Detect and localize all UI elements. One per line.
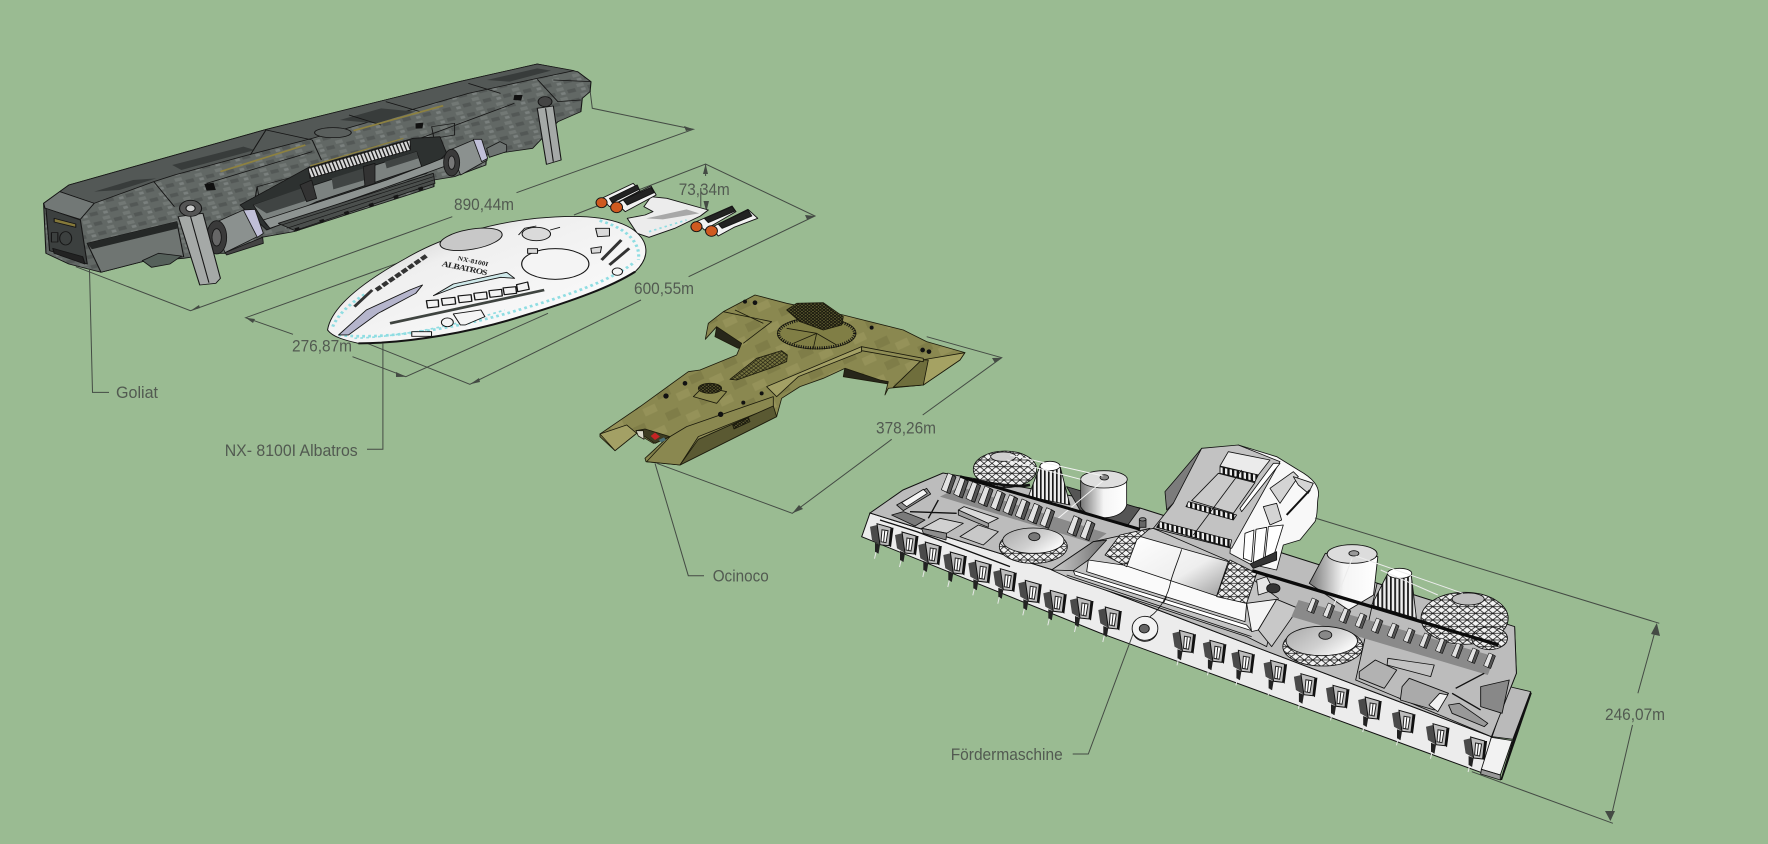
Ocinoco front bay (636, 429, 670, 443)
cone right (1372, 568, 1416, 618)
label: 246,07m: 246,07m (1605, 706, 1665, 724)
Ocinoco dome (787, 303, 843, 330)
Albatros lower hatch (412, 268, 623, 336)
Ocinoco spine hatch (730, 351, 787, 380)
dimension: Ocinoco 378,26m (657, 337, 1002, 513)
Goliat lower hull (87, 222, 184, 272)
label: 276,87m: 276,87m (292, 338, 352, 356)
rear pipe joint (1257, 577, 1280, 595)
Goliat rear shoulder seams (537, 79, 591, 102)
back rail right (1252, 571, 1499, 645)
command top panel (1220, 452, 1270, 475)
Goliat keel rail (278, 173, 435, 231)
label: 890,44m: 890,44m (454, 196, 514, 214)
Goliat hull dark stripe (87, 222, 178, 249)
back rail left (960, 477, 1140, 529)
Albatros neck cyan marks (649, 220, 687, 232)
deck machinery right (1359, 658, 1509, 727)
central plinth and barrel (1052, 445, 1319, 647)
Albatros nacelles upper pair (596, 183, 656, 213)
command flank panels (1263, 472, 1313, 525)
Ocinoco front fork left (600, 425, 637, 451)
dimension lines: Albatros 600,55m, 276,87m and 73,34m (246, 164, 815, 384)
machine main deck (870, 473, 1516, 737)
Goliat side seam lines (154, 103, 514, 207)
Ocinoco hull spine (647, 397, 773, 465)
plinth lower bands (1067, 571, 1252, 637)
Albatros forward deck lines (354, 240, 629, 307)
command mid grill (1186, 502, 1237, 520)
plinth left wedge (1052, 540, 1107, 571)
barrel lattice right (1217, 560, 1257, 603)
end block base (1481, 769, 1500, 780)
Goliat forward engine (444, 139, 488, 176)
cable lines (880, 500, 1010, 567)
end block top (1492, 687, 1531, 739)
barrel lattice left (1105, 528, 1150, 567)
command lower grill (1157, 522, 1232, 547)
Ocinoco side vent (733, 417, 750, 429)
Goliat drum dark sections (253, 152, 418, 213)
raised hatch one (922, 518, 963, 540)
Goliat side window frame (257, 123, 455, 200)
Albatros hull name: NX-8100I (457, 255, 489, 268)
plinth white step (1087, 560, 1247, 622)
Goliat front face (46, 208, 87, 264)
ship: NX-8100I Albatros (328, 183, 758, 343)
Goliat machinery dark bay (240, 137, 447, 230)
Albatros hull rail (390, 290, 544, 323)
Goliat front details (51, 218, 85, 264)
louvre vents (1243, 525, 1283, 568)
lattice dome right (1421, 592, 1508, 650)
command block right flank (1230, 445, 1319, 570)
Goliat comb grating (308, 140, 411, 178)
Ocinoco leading edge (767, 347, 862, 397)
leader: Goliat (90, 270, 109, 392)
end block dark side (1500, 692, 1532, 780)
command mid panel (1192, 473, 1255, 513)
dark vent tray (892, 512, 925, 526)
Goliat roof (60, 64, 574, 203)
Albatros ventral strip (339, 285, 422, 335)
Albatros bridge dome (519, 226, 560, 241)
Goliat front chamfer (44, 192, 94, 219)
right half details (1132, 545, 1516, 737)
label: NX- 8100I Albatros: NX- 8100I Albatros (225, 442, 358, 460)
leader: Albatros (367, 343, 383, 449)
leader: Fördermaschine (1073, 633, 1133, 754)
label: Fördermaschine: Fördermaschine (951, 746, 1063, 764)
Goliat gold stripes (220, 106, 443, 172)
ship: Fördermaschine (862, 445, 1532, 780)
dimension: Fördermaschine 246,07m (1315, 518, 1660, 823)
end block lower (1481, 737, 1512, 775)
Albatros hull name: ALBATROS (441, 259, 489, 277)
Goliat drum joints (300, 163, 375, 202)
flat dome left (999, 528, 1067, 563)
Ocinoco hull dots (663, 300, 931, 417)
command seam (1193, 470, 1242, 535)
Albatros neck shading (646, 209, 699, 219)
pipes right (1331, 556, 1463, 613)
central barrel (1127, 535, 1228, 596)
cylinder left (1081, 471, 1127, 518)
label: 600,55m: 600,55m (634, 280, 694, 298)
lattice dome left (973, 451, 1037, 488)
Goliat hatches (204, 95, 523, 191)
Goliat landing struts (178, 97, 561, 285)
Ocinoco hull (600, 295, 965, 465)
Ocinoco ring platform (777, 318, 856, 349)
Albatros lower rim (358, 272, 635, 343)
cone left (1028, 461, 1070, 505)
Goliat lower pod (142, 253, 181, 267)
Ocinoco wing ridge (893, 360, 928, 387)
Goliat right landing strut (537, 97, 561, 164)
plinth right wedge (1247, 599, 1277, 632)
Albatros top hatch (438, 224, 504, 255)
stacked vent box (897, 488, 931, 511)
side port disc right half (1132, 616, 1158, 640)
Ocinoco side panel (680, 406, 777, 465)
deck machinery at left end (880, 488, 1010, 567)
raised hatch two (958, 507, 998, 527)
command deck (1153, 445, 1280, 548)
label: 378,26m: 378,26m (876, 419, 936, 437)
Goliat underside machinery (207, 137, 507, 255)
Ocinoco wing undersides (715, 327, 890, 384)
Albatros hull cyan markings (333, 221, 639, 338)
label: Ocinoco: Ocinoco (713, 568, 769, 586)
machine end block (1481, 687, 1532, 780)
machine side modules (870, 524, 1487, 772)
Goliat main drum (253, 152, 422, 225)
ship: Goliat (44, 64, 591, 285)
fins left (941, 473, 1095, 541)
Ocinoco turret (693, 383, 727, 403)
pipes left (1007, 455, 1103, 533)
Albatros upper panel (434, 272, 515, 296)
machine side wall (862, 513, 1491, 773)
Goliat body (44, 64, 591, 272)
small stack (1139, 518, 1146, 527)
Albatros engineering neck (627, 197, 708, 237)
Goliat roof dark plates (94, 68, 551, 192)
Ocinoco rear ridge (862, 347, 923, 362)
Albatros small hatches (528, 228, 609, 253)
label: 73,34m: 73,34m (679, 181, 730, 199)
Goliat rail lines (282, 177, 434, 228)
Goliat left landing strut (178, 200, 220, 285)
Albatros window squares (426, 282, 529, 308)
dimension: Goliat length 890,44m (76, 90, 693, 311)
Goliat long barrel (263, 157, 448, 228)
Ocinoco port wing frame (723, 310, 772, 343)
plinth base (1052, 528, 1278, 647)
Goliat roof seams (250, 83, 501, 155)
barrel seam (1150, 549, 1182, 617)
cylinder right (1309, 545, 1378, 610)
Albatros nacelles lower pair (691, 206, 758, 236)
ship: Ocinoco (600, 295, 965, 465)
fin shadow band right (1291, 600, 1495, 675)
Goliat gold comb stripe (310, 138, 403, 166)
Goliat rail studs (295, 184, 435, 230)
Goliat rear engine (207, 209, 263, 255)
fins right (1307, 598, 1495, 668)
Goliat aft barrel (487, 142, 507, 157)
side port disc (1132, 617, 1158, 641)
command right trim (1240, 463, 1280, 512)
deck plate right (1356, 583, 1516, 737)
left half details (940, 451, 1158, 641)
label: Goliat: Goliat (116, 384, 158, 402)
Albatros saucer (328, 216, 646, 343)
Goliat hull silhouette (44, 64, 591, 272)
command top grill (1220, 467, 1258, 482)
command left flank (1165, 448, 1220, 510)
Ocinoco starboard wing tip (893, 353, 965, 387)
dark deck plate behind cylinder (1067, 487, 1140, 527)
raised hatch three (960, 525, 998, 545)
flat dome right (1283, 626, 1363, 666)
Albatros dorsal circle (522, 249, 589, 279)
Goliat roof ring (315, 128, 351, 138)
leader: Ocinoco (655, 463, 704, 576)
fin shadow band left (940, 487, 1107, 543)
command flank dark seam (1287, 490, 1310, 515)
plinth right slab (1258, 599, 1298, 647)
